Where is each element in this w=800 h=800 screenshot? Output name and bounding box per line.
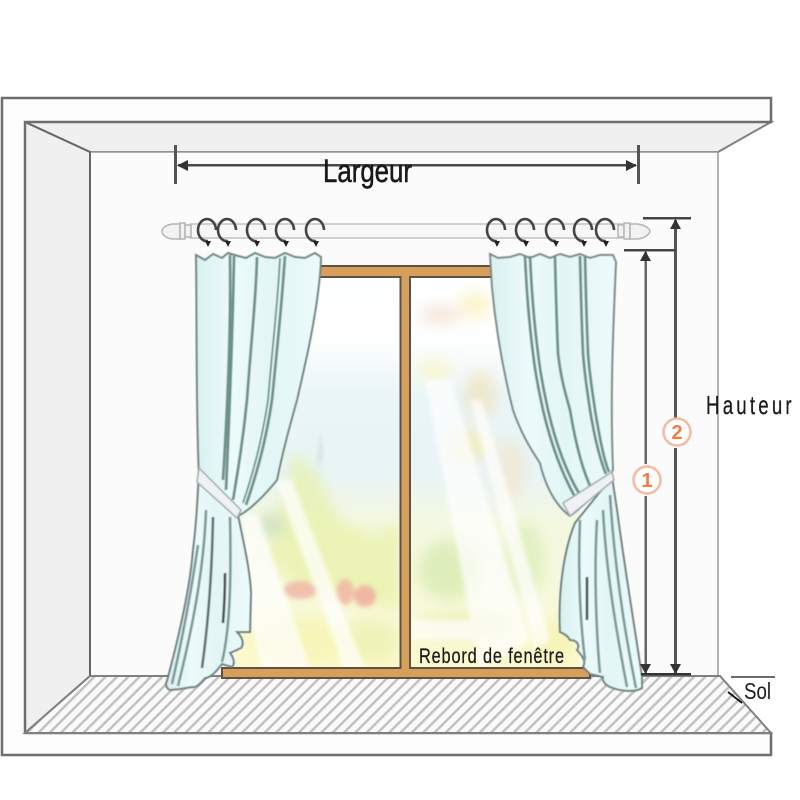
marker 1: 1 [641, 470, 653, 492]
right curtain upper pleats [525, 256, 609, 497]
marker 1 [634, 466, 660, 494]
left curtain lower drape [166, 470, 251, 690]
height line 1 [624, 249, 676, 674]
left side wall [25, 122, 90, 733]
room structure [2, 98, 771, 755]
label: Sol: Sol [744, 678, 771, 704]
right tieback [563, 472, 614, 516]
right curtain lower pleats [579, 495, 636, 688]
right finial [618, 223, 650, 239]
label: Largeur: Largeur [323, 153, 412, 189]
outer wall band [2, 98, 771, 755]
dimension: width [174, 145, 640, 184]
window frame [222, 266, 590, 678]
back wall [90, 152, 718, 676]
marker 2: 2 [671, 422, 683, 444]
label: Rebord de fenêtre: Rebord de fenêtre [419, 644, 564, 667]
dimension: height [624, 217, 691, 676]
left finial [162, 223, 191, 239]
floor level line [731, 676, 775, 678]
left curtain [166, 253, 321, 690]
left tieback [197, 468, 241, 518]
curtain rod [162, 223, 650, 239]
window [222, 266, 590, 678]
left curtain upper pleats [223, 255, 285, 505]
left curtain lower pleats [172, 510, 230, 686]
ceiling [25, 122, 771, 152]
curtain rings [198, 219, 614, 247]
label: Hauteur: Hauteur [706, 390, 792, 420]
height line 2 [643, 217, 691, 674]
leader: Sol [728, 692, 742, 703]
right curtain lower drape [560, 477, 642, 691]
marker 2 [664, 418, 690, 446]
window landscape [235, 276, 580, 669]
left curtain upper drape [196, 253, 321, 516]
floor with hatching [25, 676, 771, 733]
right curtain upper drape [490, 254, 616, 516]
light rays [243, 380, 550, 669]
right curtain [490, 254, 642, 691]
